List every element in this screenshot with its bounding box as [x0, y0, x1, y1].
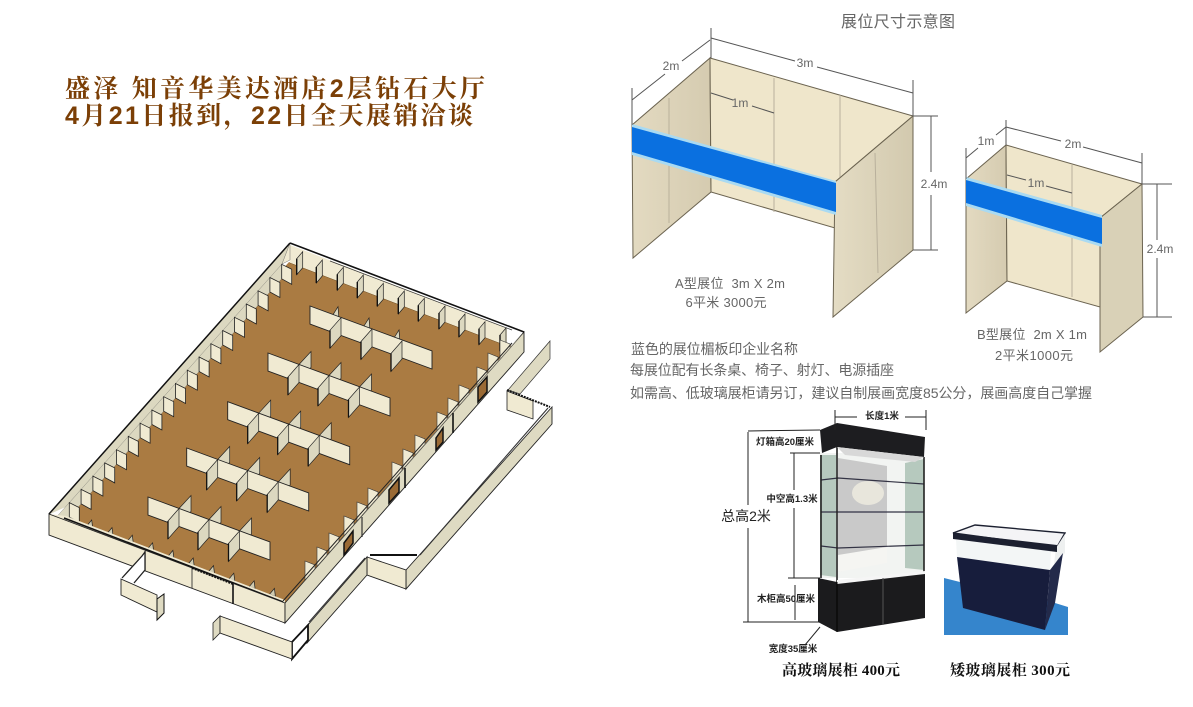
title: 盛泽 知音华美达酒店2层钻石大厅 [65, 74, 485, 103]
cabinet annotations: 木柜高50厘米 [757, 593, 816, 605]
cabinet glass body [820, 453, 924, 578]
booth row 2 [268, 352, 390, 418]
left wall with booths [50, 243, 292, 531]
floor [62, 262, 512, 603]
back wall [290, 245, 507, 351]
right wall [1100, 184, 1143, 352]
right wall [833, 116, 913, 317]
cabinet glass [956, 540, 1051, 570]
cabinet annotations [721, 410, 899, 655]
cabinet top [953, 525, 1065, 547]
booth type A diagram [632, 28, 947, 317]
booth type B diagram [966, 120, 1173, 363]
cabinet annotations: 中空高1.3米 [766, 493, 818, 505]
title [65, 74, 485, 131]
caption A: 6平米 3000元 [686, 295, 766, 310]
front wall [49, 514, 285, 623]
dimension lines [632, 28, 938, 250]
back wall [1006, 145, 1142, 307]
dimension labels: 2m [1065, 137, 1081, 151]
left side small segment [121, 552, 164, 620]
booth row 3 [228, 400, 350, 466]
lower door frame [292, 625, 308, 659]
cabinet light box [820, 423, 925, 462]
booth notes: 每展位配有长条桌、椅子、射灯、电源插座 [630, 362, 894, 378]
dimension labels: 2.4m [921, 177, 947, 191]
blue fascia [966, 177, 1102, 247]
cabinet base [818, 571, 925, 632]
caption B: B型展位 2m X 1m [977, 327, 1087, 342]
cabinet dimension lines [743, 410, 926, 645]
dimension labels [978, 134, 1173, 256]
cabinet annotations: 灯箱高20厘米 [756, 436, 815, 448]
booth notes: 蓝色的展位楣板印企业名称 [631, 341, 798, 357]
caption A: A型展位 3m X 2m [675, 276, 785, 291]
dimension labels: 3m [797, 56, 813, 70]
tall cabinet label: 高玻璃展柜 400元 [782, 661, 900, 679]
floor plan: hall isometric view [49, 243, 552, 659]
cabinet annotations: 宽度35厘米 [769, 643, 818, 655]
outer corridor lower block [307, 555, 417, 643]
cabinet annotations: 总高2米 [721, 508, 771, 524]
diagram heading: 展位尺寸示意图 [841, 12, 955, 31]
title: 4月21日报到，22日全天展销洽谈 [65, 102, 473, 131]
dimension labels: 1m [1028, 176, 1044, 190]
front wall fins [87, 520, 275, 596]
cabinet shelves [821, 447, 924, 582]
back wall [710, 58, 913, 228]
left wall [966, 145, 1007, 313]
dimension labels: 1m [978, 134, 994, 148]
low glass cabinet [944, 525, 1070, 679]
right side booths [305, 340, 510, 581]
low cabinet label: 矮玻璃展柜 300元 [950, 661, 1070, 679]
booth notes: 如需高、低玻璃展柜请另订，建议自制展画宽度85公分，展画高度自己掌握 [630, 385, 1092, 401]
blue fascia [632, 124, 836, 215]
dimension lines [966, 120, 1172, 317]
blue floor [944, 578, 1068, 635]
booth notes [630, 341, 1092, 401]
cabinet annotations: 长度1米 [865, 410, 899, 422]
booth row 4 [187, 446, 309, 512]
seams [669, 78, 840, 223]
booth row 5 [148, 496, 270, 562]
cabinet right side [1045, 553, 1063, 630]
cabinet right glass [1054, 534, 1065, 564]
cabinet body [957, 557, 1050, 630]
caption A [675, 276, 785, 310]
dimension labels: 2m [663, 59, 679, 73]
lower wall segment [213, 616, 292, 659]
left wall [632, 58, 711, 258]
outer corridor long wall [406, 407, 552, 589]
dimension labels: 2.4m [1147, 242, 1173, 256]
right wall with doors [283, 332, 524, 623]
tall glass cabinet [721, 410, 926, 679]
caption B [977, 327, 1087, 363]
caption B: 2平米1000元 [995, 348, 1073, 363]
cabinet frame [953, 533, 1057, 552]
outer corridor upper piece [508, 341, 550, 394]
outer corridor corner block [507, 390, 550, 419]
back rim [49, 243, 524, 514]
dimension labels [663, 56, 947, 191]
booth row 1 [310, 306, 432, 372]
dimension labels: 1m [732, 96, 748, 110]
